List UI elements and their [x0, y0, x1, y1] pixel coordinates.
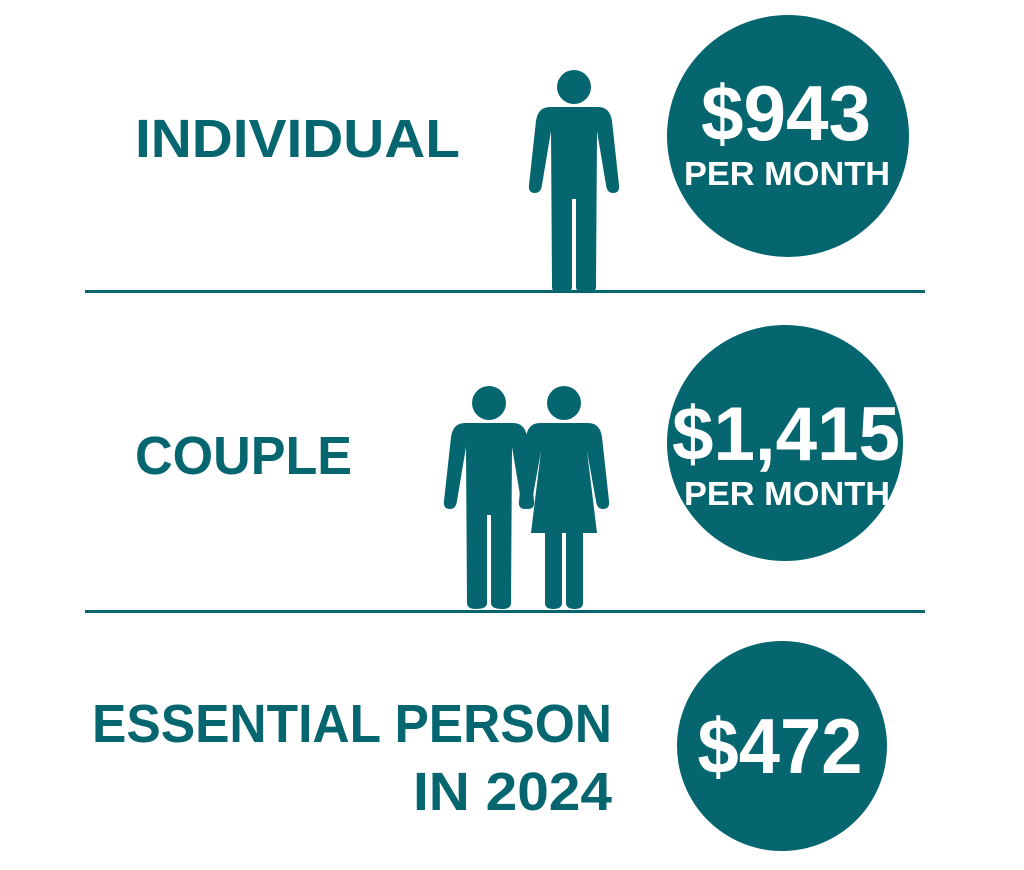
label: essential person: ESSENTIAL PERSON — [92, 694, 612, 754]
circle: couple amount — [667, 325, 903, 561]
label: individual: INDIVIDUAL — [135, 109, 460, 169]
icon: couple — [444, 386, 609, 609]
label: couple: COUPLE — [135, 426, 352, 486]
circle: individual amount: $943 — [701, 69, 871, 157]
divider lines — [85, 290, 925, 613]
circle: essential person amount: $472 — [698, 702, 862, 790]
circle: couple amount: PER MONTH — [684, 475, 890, 512]
circle: individual amount: PER MONTH — [684, 155, 890, 192]
circle: individual amount — [667, 15, 909, 257]
circle: couple amount: $1,415 — [672, 392, 900, 477]
label: essential person — [92, 694, 612, 822]
label: essential person: IN 2024 — [413, 762, 612, 822]
circle: essential person amount — [677, 641, 887, 851]
icon: individual person — [529, 70, 619, 293]
